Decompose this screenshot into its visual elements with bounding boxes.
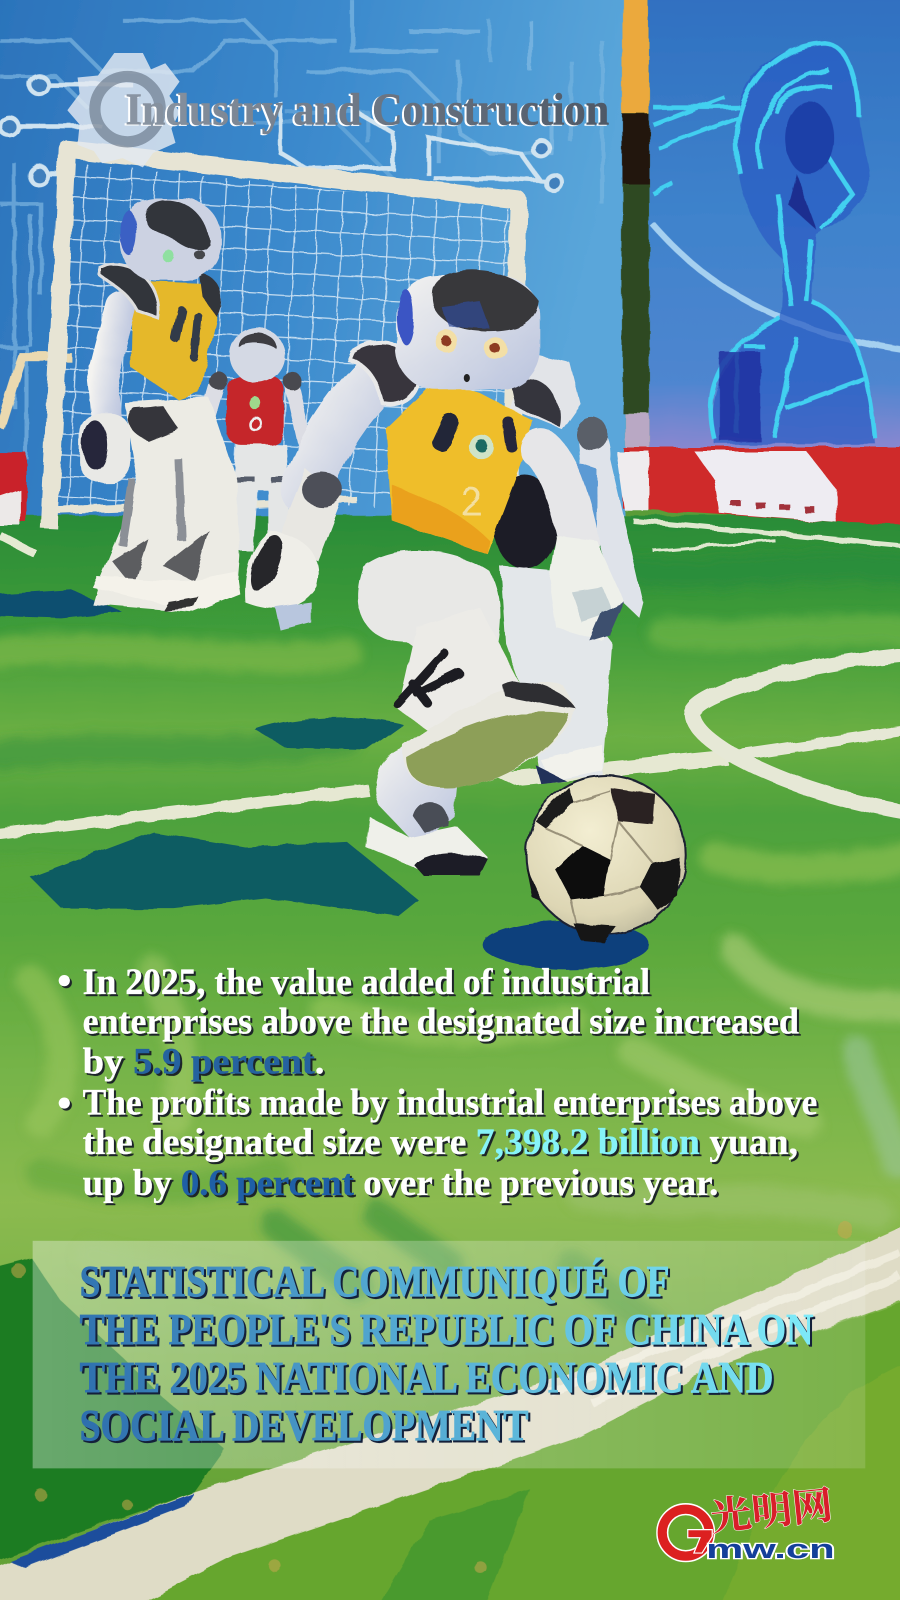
bullet 1: In 2025, the value added of industrial xyxy=(83,961,650,1002)
shadows on grass xyxy=(0,590,650,969)
text block: key figures xyxy=(59,961,817,1203)
bullet 2: the designated size were 7,398.2 billion yuan, xyxy=(83,1121,798,1162)
bullet 2: The profits made by industrial enterprises above xyxy=(83,1081,817,1122)
hologram wall xyxy=(649,0,900,454)
blue circuit wall xyxy=(0,0,624,541)
logo: Guangming Online xyxy=(662,1484,835,1564)
title: Industry and Construction xyxy=(126,83,609,134)
logo: Guangming Online: 光明网 xyxy=(709,1484,835,1540)
goal with net xyxy=(49,149,518,529)
back robot xyxy=(493,352,643,784)
heading: communiqué: STATISTICAL COMMUNIQUÉ OF xyxy=(80,1256,669,1306)
heading: communiqué: SOCIAL DEVELOPMENT xyxy=(80,1400,529,1450)
bullet 2: up by 0.6 percent over the previous year. xyxy=(83,1162,718,1203)
head xyxy=(396,270,540,390)
bullet 2 xyxy=(59,1081,817,1203)
pillar xyxy=(622,0,649,449)
icon: gear xyxy=(67,53,180,167)
barriers xyxy=(0,447,900,526)
vest xyxy=(386,380,533,554)
right arm xyxy=(541,449,580,546)
arm xyxy=(244,343,419,631)
main robot xyxy=(244,270,624,876)
heading: communiqué xyxy=(80,1256,813,1450)
football xyxy=(527,776,686,943)
raised sole xyxy=(403,683,577,788)
left yellow robot xyxy=(80,199,240,612)
legs xyxy=(358,550,499,673)
small red robot xyxy=(204,328,308,551)
heading: communiqué: THE 2025 NATIONAL ECONOMIC AND xyxy=(80,1352,773,1402)
logo: Guangming Online: mw.cn xyxy=(706,1534,835,1564)
bullet 1: enterprises above the designated size increased xyxy=(83,1001,800,1042)
main robot: 2 xyxy=(461,481,483,524)
grass field xyxy=(0,515,900,1600)
bullet 1 xyxy=(59,961,800,1081)
panel: communiqué title xyxy=(33,1241,865,1468)
bullet 1: by 5.9 percent . xyxy=(83,1040,324,1081)
